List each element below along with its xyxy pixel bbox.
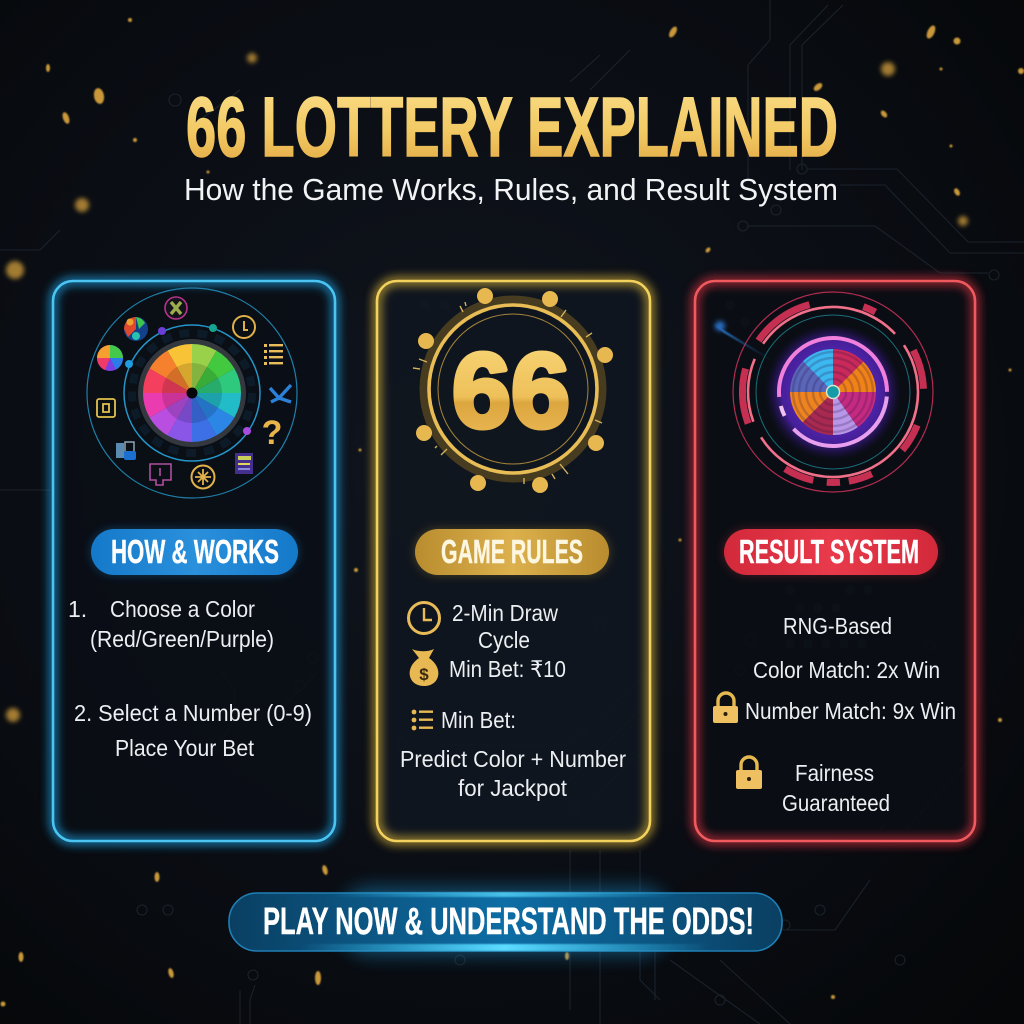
icon: rule list: [412, 710, 433, 730]
icon: blue check: [270, 385, 291, 402]
text: draw cycle: Cycle: [478, 627, 530, 653]
text: steps: Place Your Bet: [115, 735, 255, 761]
wedges: [790, 349, 876, 435]
text: draw cycle: [452, 600, 558, 653]
panel: how it works: [53, 281, 335, 841]
icon: clock: [408, 602, 440, 634]
call to action button: PLAY NOW & UNDERSTAND THE ODDS!: [263, 901, 754, 943]
icon: document: [235, 453, 253, 474]
icon: question mark: ?: [262, 414, 282, 452]
salmon ring arcs: [715, 274, 951, 510]
icon: pink screen: [150, 464, 171, 485]
panel: result system: [695, 266, 975, 841]
text: jackpot rule: for Jackpot: [458, 775, 568, 801]
text: steps: 2. Select a Number (0-9): [74, 700, 312, 726]
text: fairness: Fairness: [795, 760, 874, 786]
icon: gold gear: [192, 466, 214, 488]
icon: stopwatch: [233, 316, 255, 338]
heading pill: game rules: GAME RULES: [441, 533, 583, 570]
call to action button: [229, 886, 782, 956]
comet pointer: [714, 321, 778, 364]
text: draw cycle: 2-Min Draw: [452, 600, 558, 626]
text: result lines: [745, 613, 956, 724]
text: result lines: Number Match: 9x Win: [745, 698, 956, 724]
text: result lines: Color Match: 2x Win: [753, 657, 940, 683]
dot grid background: [420, 300, 873, 649]
text: jackpot rule: Predict Color + Number: [400, 746, 626, 772]
text: fairness: [782, 760, 890, 816]
big 66 number: 66: [452, 332, 570, 450]
text: steps: [68, 596, 312, 761]
icon: padlock two: [736, 757, 762, 789]
heading pill: how and works: [91, 529, 298, 575]
panel: game rules: [377, 281, 650, 841]
heading pill: result system: [724, 529, 938, 575]
radar wheel diagram: [707, 266, 959, 518]
text: steps: (Red/Green/Purple): [90, 626, 274, 652]
text: fairness: Guaranteed: [782, 790, 890, 816]
icon: pink circle: [165, 297, 187, 319]
icon: money bag: $: [419, 665, 429, 684]
icon: segmented ball: [124, 317, 148, 341]
subtitle: How the Game Works, Rules, and Result System: [184, 172, 838, 207]
text: jackpot rule: [400, 707, 626, 801]
heading pill: result system: RESULT SYSTEM: [739, 533, 919, 570]
icon: padlock one: [713, 693, 738, 723]
icon wheel diagram: [87, 288, 297, 498]
text: min bet amount: Min Bet: ₹10: [449, 656, 566, 682]
pink ring arcs: [761, 320, 905, 464]
text: steps: Choose a Color: [110, 596, 255, 622]
icon: money bag: [410, 649, 438, 686]
heading pill: how and works: HOW & WORKS: [111, 533, 279, 570]
icon: blue device: [116, 442, 136, 460]
crimson blocks: [707, 266, 959, 518]
text: steps: 1.: [68, 596, 87, 622]
icon: list: [264, 344, 283, 365]
text: result lines: RNG-Based: [783, 613, 892, 639]
heading pill: game rules: [415, 529, 609, 575]
icon: small colour wheel: [97, 345, 123, 371]
emblem: 66 ring: [413, 288, 613, 493]
text: jackpot rule: Min Bet:: [441, 707, 516, 733]
icon: gold square: [97, 399, 115, 417]
